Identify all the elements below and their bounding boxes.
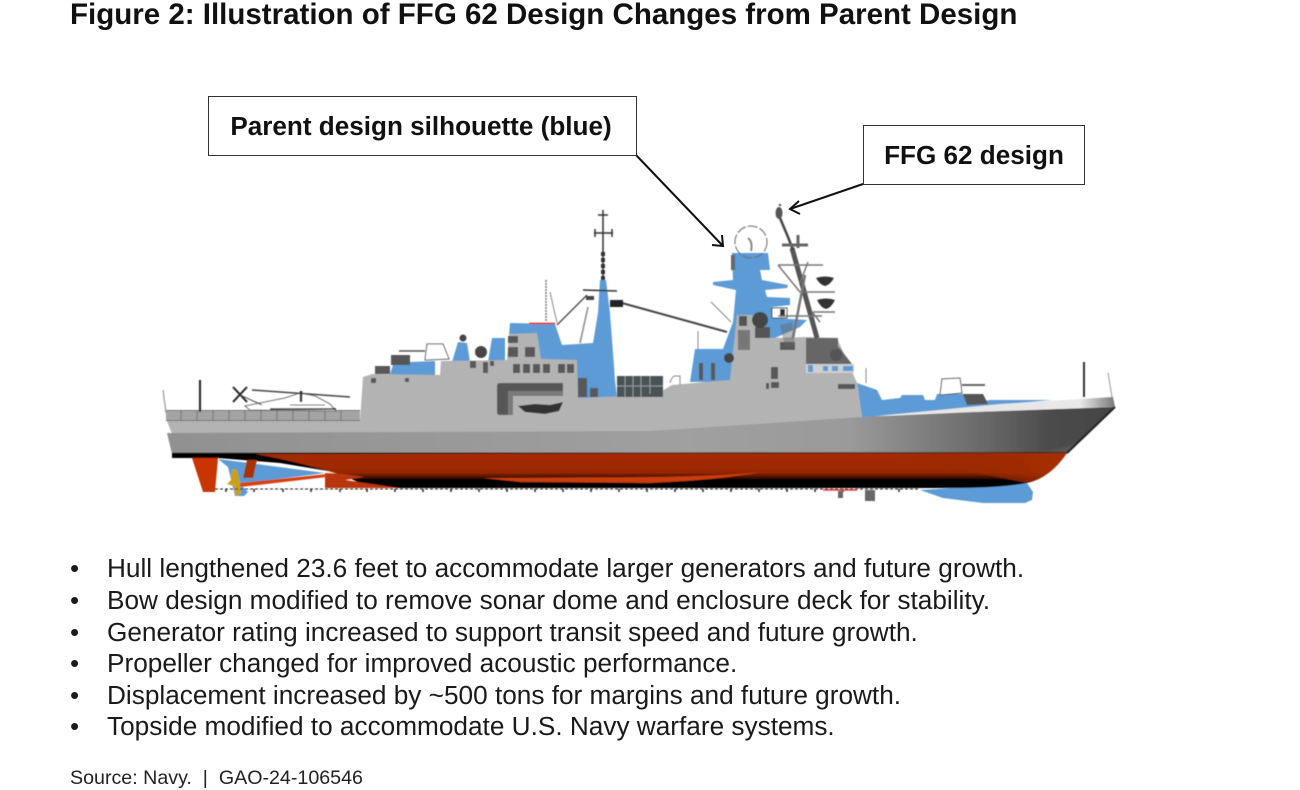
bullet list of design changes: Bow design modified to remove sonar dome and enclosure deck for stability. xyxy=(107,585,990,615)
bullet list of design changes: Hull lengthened 23.6 feet to accommodate larger generators and future growth. xyxy=(107,553,1024,583)
bow staffs xyxy=(1083,362,1085,397)
bullet list of design changes: • xyxy=(70,711,79,741)
parent design silhouette: blue shapes xyxy=(218,253,1052,503)
bow deck strip xyxy=(887,397,1115,415)
first mast xyxy=(546,210,731,349)
rescue boat xyxy=(518,402,563,414)
bullet list of design changes: • xyxy=(70,680,79,710)
radome xyxy=(735,226,767,258)
bullet list of design changes: Topside modified to accommodate U.S. Navy warfare systems. xyxy=(107,711,835,741)
forward mast platforms xyxy=(724,255,854,373)
bullet list of design changes: • xyxy=(70,648,79,678)
helicopter xyxy=(233,387,350,411)
rudder skeg xyxy=(192,458,218,492)
bullet list of design changes: Displacement increased by ~500 tons for margins and future growth. xyxy=(107,680,901,710)
source line: Source: Navy. | GAO-24-106546 xyxy=(70,767,363,789)
red roof strip xyxy=(529,322,555,324)
arrow: FFG 62 callout xyxy=(790,184,863,214)
arrow: parent design callout xyxy=(636,155,723,246)
bullet list of design changes: Generator rating increased to support transit speed and future growth. xyxy=(107,617,918,647)
red streak xyxy=(483,472,762,483)
boat bay xyxy=(497,383,563,415)
superstructure xyxy=(167,315,862,434)
stern black band xyxy=(172,453,370,478)
bullet list of design changes xyxy=(70,553,1024,741)
keel line with ticks xyxy=(215,489,920,492)
bullet list of design changes: • xyxy=(70,553,79,583)
windows and deck equipment xyxy=(371,336,855,397)
propeller xyxy=(227,469,241,496)
red lower hull xyxy=(255,453,1067,488)
propeller shaft xyxy=(240,474,327,487)
waterline xyxy=(172,452,1067,454)
hull side band xyxy=(167,407,1115,454)
stern railing xyxy=(166,410,360,421)
bullet list of design changes: Propeller changed for improved acoustic performance. xyxy=(107,648,737,678)
bow highlight xyxy=(960,407,1115,453)
stern masts xyxy=(199,380,201,412)
callout: FFG 62 design: FFG 62 design xyxy=(884,140,1064,170)
radar mast xyxy=(776,205,835,347)
callout: parent design silhouette xyxy=(208,96,637,156)
callout: parent design silhouette: Parent design silhouette (blue) xyxy=(230,111,612,141)
aft hull red xyxy=(325,473,400,488)
bullet list of design changes: • xyxy=(70,585,79,615)
bullet list of design changes: • xyxy=(70,617,79,647)
callout: FFG 62 design xyxy=(863,125,1085,185)
aft deck cells xyxy=(617,376,663,397)
deck guns xyxy=(393,334,988,405)
